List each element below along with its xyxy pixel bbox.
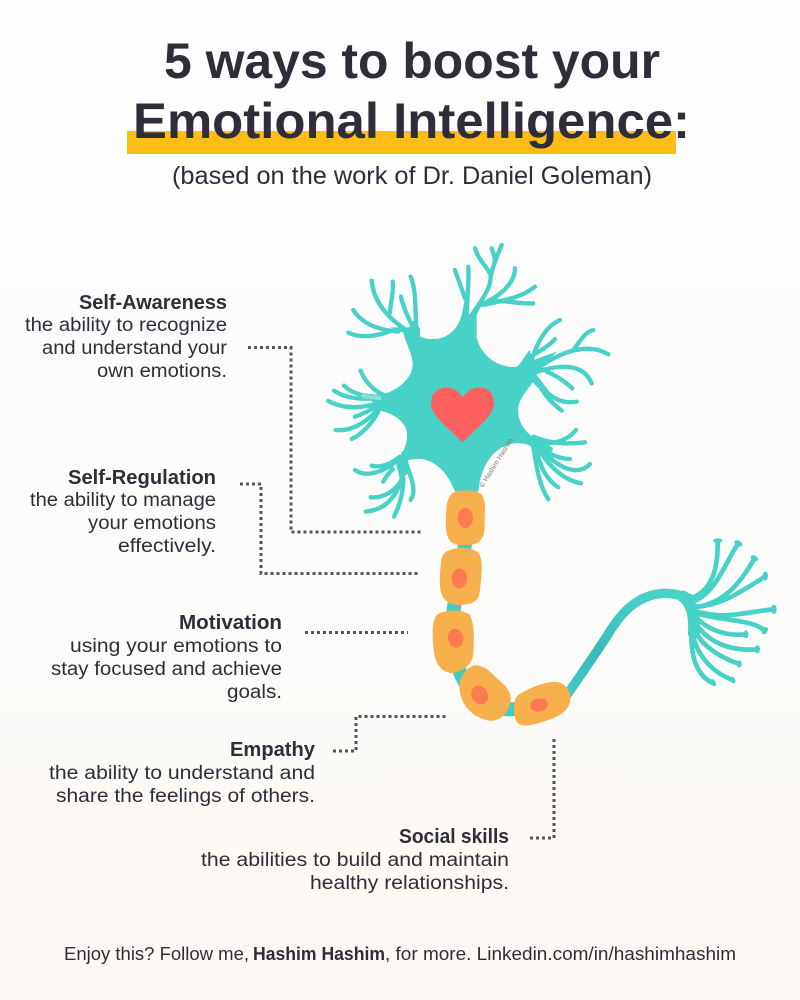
text block: self-regulation: the ability to manage (30, 490, 216, 511)
text block: self-awareness: Self-Awareness (79, 292, 227, 314)
text block: empathy: Empathy (230, 739, 316, 761)
title line 1: 5 ways to boost your (164, 33, 660, 89)
dotted connectors (240, 348, 554, 838)
myelin cell 1 (446, 490, 485, 545)
text block: self-awareness: own emotions. (97, 361, 227, 382)
text block: self-awareness: and understand your (42, 338, 228, 359)
text block: self-regulation (30, 467, 216, 557)
axon terminals (683, 541, 774, 683)
icon: heart (431, 387, 494, 442)
text block: empathy: the ability to understand and (49, 763, 315, 784)
text block: social skills: Social skills (399, 826, 509, 848)
footer (64, 944, 736, 964)
text block: motivation: stay focused and achieve (51, 659, 282, 680)
dendrites (328, 245, 608, 517)
text block: self-awareness: the ability to recognize (25, 315, 227, 336)
footer: Enjoy this? Follow me, (64, 944, 249, 964)
myelin cell 3 (433, 611, 474, 673)
text block: social skills (201, 826, 509, 894)
dendrite trunks (370, 297, 557, 480)
text block: social skills: healthy relationships. (310, 873, 509, 894)
myelin cell 4 (459, 665, 511, 721)
soma (377, 315, 540, 492)
title (127, 33, 690, 154)
text block: empathy (49, 739, 316, 807)
text block: self-awareness (25, 292, 228, 382)
text block: empathy: share the feelings of others. (56, 786, 315, 807)
neuron cell body with dendrites (328, 245, 608, 517)
axon (567, 593, 692, 695)
myelin cell 5 (514, 682, 570, 725)
text block: motivation (51, 612, 282, 703)
myelin cell 2 (440, 548, 482, 605)
footer: Hashim Hashim (253, 944, 385, 964)
neuron illustration (328, 245, 777, 725)
axon connectors (453, 543, 520, 709)
text block: motivation: goals. (227, 682, 282, 703)
text block: motivation: using your emotions to (70, 636, 282, 657)
text block: self-regulation: your emotions (88, 513, 216, 534)
highlight bar (127, 131, 676, 154)
text block: social skills: the abilities to build and maintain (201, 850, 509, 871)
axon and myelin (433, 490, 777, 725)
footer: , for more. Linkedin.com/in/hashimhashim (385, 944, 736, 964)
text block: self-regulation: effectively. (118, 536, 216, 557)
text block: motivation: Motivation (179, 612, 282, 634)
watermark: © Hashim Hashim (478, 437, 515, 489)
axon terminal tips (709, 538, 777, 687)
text block: self-regulation: Self-Regulation (68, 467, 216, 489)
faint mark on left dendrite (363, 396, 379, 398)
title line 2: Emotional Intelligence: (133, 93, 690, 149)
subtitle: (based on the work of Dr. Daniel Goleman) (172, 162, 652, 190)
